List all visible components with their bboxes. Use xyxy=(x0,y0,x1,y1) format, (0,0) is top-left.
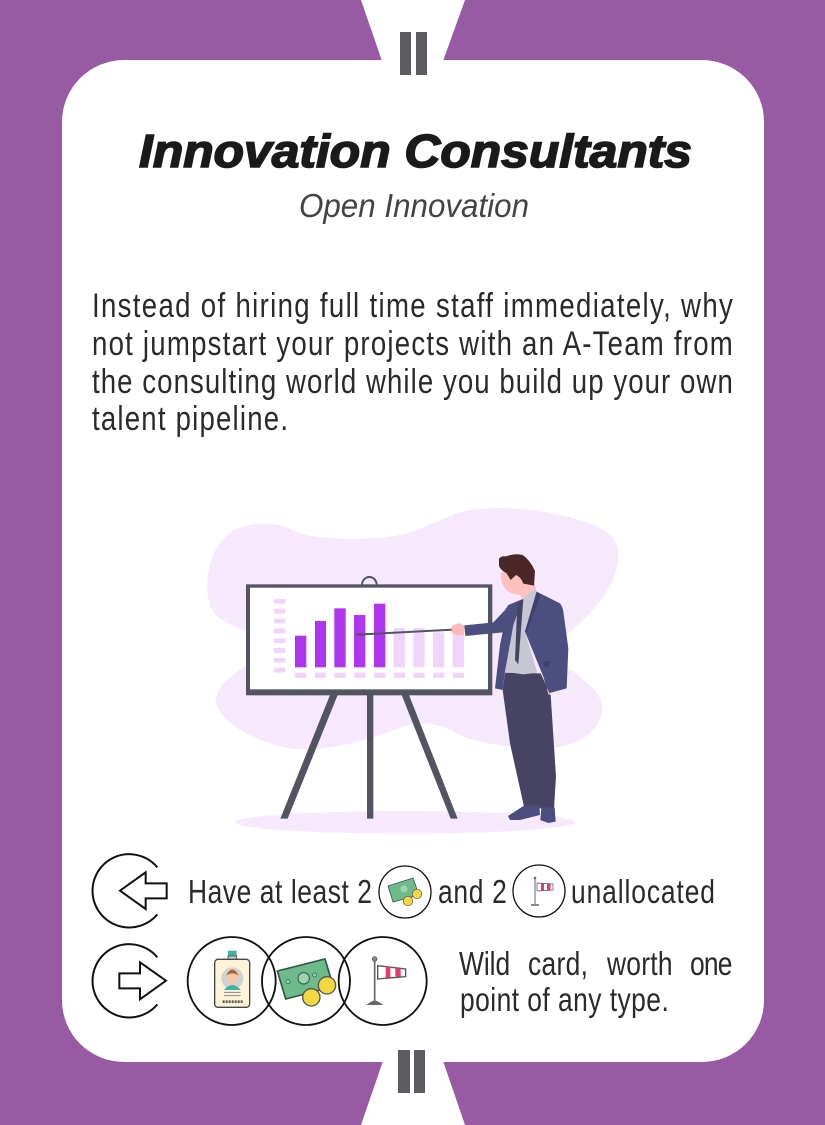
requirement text: Have at least 2 xyxy=(188,874,372,911)
icon: windsock xyxy=(339,937,427,1025)
hand xyxy=(452,623,464,635)
icon: id badge xyxy=(188,937,276,1025)
hair xyxy=(499,554,535,586)
text block: description: the consulting world while you build up your own xyxy=(92,362,733,401)
reward text: worth xyxy=(606,946,673,983)
icon: output arrow xyxy=(93,944,166,1017)
requirement text xyxy=(188,874,715,911)
jacket xyxy=(464,592,568,693)
icon: input arrow xyxy=(93,854,167,927)
icon: bottom pause connector xyxy=(398,1050,425,1093)
reward text: Wild xyxy=(459,946,510,983)
person upper body xyxy=(464,554,568,695)
icon: top pause connector xyxy=(400,32,427,75)
tie xyxy=(515,599,523,664)
board hook xyxy=(362,577,377,585)
neck and face xyxy=(501,565,536,600)
text block: description: not jumpstart your projects with an A-Team from xyxy=(92,324,733,363)
bar chart xyxy=(274,599,464,678)
background blob xyxy=(207,508,618,834)
text block: description: talent pipeline. xyxy=(92,399,288,438)
reward text xyxy=(459,946,732,1019)
reward text: one xyxy=(690,946,732,983)
subtitle: Open Innovation xyxy=(299,187,529,224)
trousers xyxy=(503,673,556,808)
easel legs xyxy=(280,695,458,819)
shoes xyxy=(508,806,556,823)
text block: description: Instead of hiring full time staff immediately, why xyxy=(92,286,733,325)
title: Innovation Consultants xyxy=(139,125,692,177)
jacket lapel xyxy=(525,592,541,632)
reward text: point of any type. xyxy=(460,982,669,1019)
requirement text: unallocated xyxy=(571,874,715,911)
pointer xyxy=(356,630,453,635)
icon: small money xyxy=(379,866,431,918)
icon: small windsock xyxy=(513,865,565,917)
reward text: card, xyxy=(528,946,588,983)
text block: description xyxy=(92,286,733,438)
icon: money and coins xyxy=(262,937,350,1025)
chart board xyxy=(246,584,492,695)
person legs and hand xyxy=(452,623,556,823)
illustration: presenter at chart board xyxy=(207,508,618,834)
icon: output resources xyxy=(188,937,427,1025)
requirement text: and 2 xyxy=(438,874,507,911)
shirt xyxy=(505,588,537,674)
pocket hand xyxy=(547,688,551,695)
jacket pocket xyxy=(543,661,550,667)
